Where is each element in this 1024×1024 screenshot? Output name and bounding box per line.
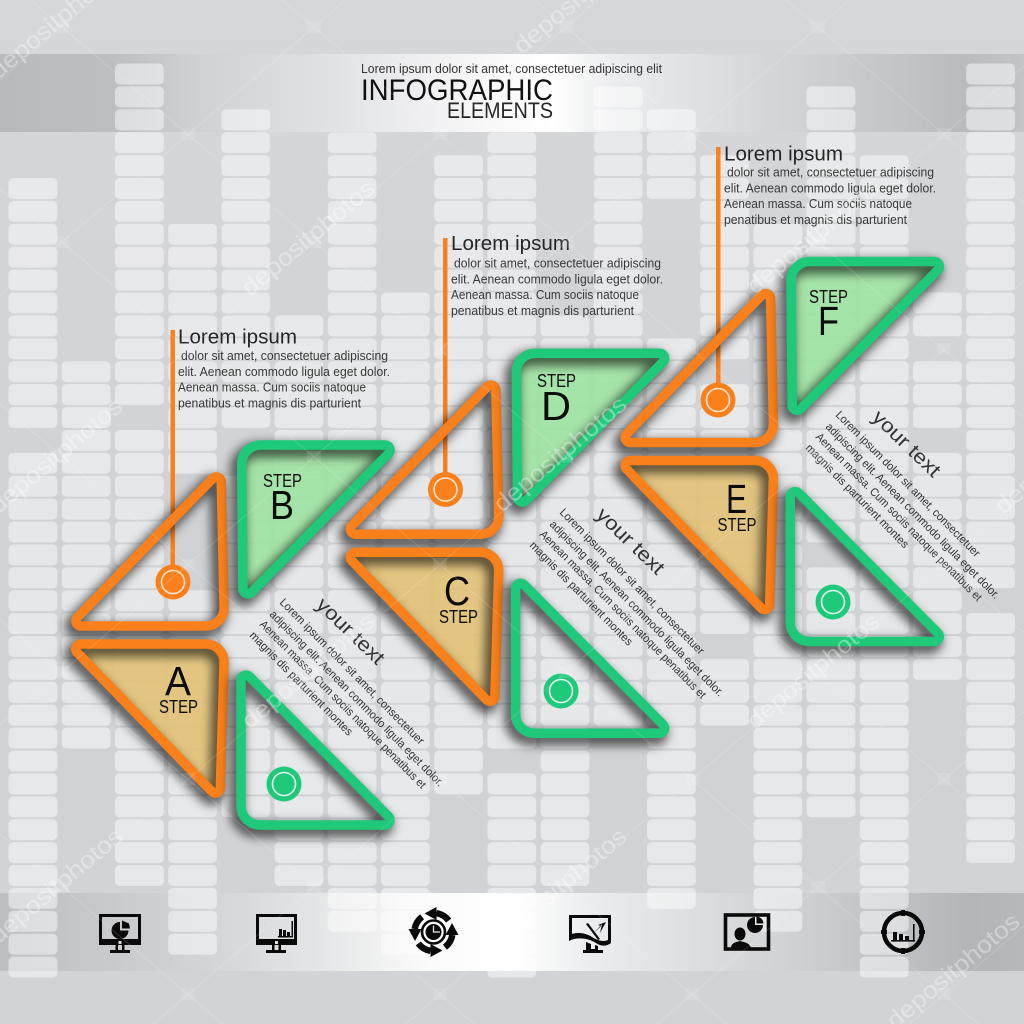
group 2: steps C and D [346,233,726,738]
heading and text block 2: elit. Aenean commodo ligula eget dolor. [451,272,663,286]
step E label [718,476,756,535]
step B label: B [270,482,294,528]
step A triangle [72,644,224,798]
callout stem E [716,147,720,387]
heading and text block 3 [724,144,936,227]
step C label [439,568,478,627]
title block [361,62,663,123]
heading and text block 1: Aenean massa. Cum sociis natoque [178,380,366,394]
step B triangle [238,445,390,599]
icon row [99,907,925,957]
circle marker C [428,472,463,507]
rotated text block 1: Lorem ipsum dolor sit amet, consectetuer [277,597,426,747]
step F label: STEP [809,287,848,307]
watermark text: depositphotos [742,608,885,735]
heading and text block 3: dolor sit amet, consectetuer adipiscing [727,166,934,180]
open orange triangle [346,385,499,539]
circle marker A [156,564,190,600]
step D label: STEP [537,371,576,391]
rotated text block 1: magnis dis parturient montes [247,630,355,739]
callout stem A [170,330,175,570]
heading and text block 2: dolor sit amet, consectetuer adipiscing [454,256,661,270]
step C label: STEP [439,607,478,627]
callout stem C [443,238,448,478]
watermark text: depositphotos [489,391,632,518]
heading and text block 1: elit. Aenean commodo ligula eget dolor. [178,365,390,379]
step E label: E [726,476,747,522]
icon: target with bar chart [881,910,925,954]
header band [0,54,1024,132]
step E label: STEP [718,515,756,535]
circle marker green [266,766,302,802]
circle marker green [816,584,850,620]
heading and text block 3: elit. Aenean commodo ligula eget dolor. [724,182,936,196]
heading and text block 3: Aenean massa. Cum sociis natoque [724,197,912,211]
step B label [263,471,302,528]
step F triangle [787,261,939,415]
open green triangle [512,583,665,738]
group 3: steps E and F [621,144,1002,646]
step B label: STEP [263,471,302,491]
step A label: A [165,658,192,704]
rotated text block 3: adipiscing elit. Aenean commodo ligula eget dolor. [823,421,1002,602]
step F label: F [818,298,839,344]
icon: monitor with pie chart [99,914,141,953]
open green triangle [237,675,390,830]
open orange triangle [72,477,224,631]
heading and text block 3: penatibus et magnis dis parturient [724,213,907,227]
rotated text block 3: magnis dis parturient montes [803,442,911,551]
rotated text block 3: Lorem ipsum dolor sit amet, consectetuer [833,409,982,560]
step E triangle [621,460,773,614]
rotated text block 2: magnis dis parturient montes [527,540,635,649]
icon: circular arrows with clock [408,907,458,957]
step D label [537,371,576,429]
heading and text block 1 [178,326,390,410]
rotated text block 3: Aenean massa. Cum sociis natoque penatibus et [813,431,984,604]
watermark text: depositphotos [237,608,380,735]
step A label [159,658,198,717]
circle marker green [544,674,578,708]
icon: curved monitor with arrow [569,915,611,953]
group 1: steps A and B [72,326,446,830]
circle marker E [700,382,736,418]
icon: monitor with bar chart [256,914,297,953]
rotated text block 3: your text [868,406,945,482]
rotated text block 2: adipiscing elit. Aenean commodo ligula eget dolor. [547,519,726,699]
watermark text: depositphotos [742,173,885,300]
step D label: D [541,383,571,429]
heading and text block 2 [451,233,663,318]
open green triangle [786,492,939,646]
step A label: STEP [159,697,198,717]
step C triangle [346,552,499,706]
rotated text block 1: adipiscing elit. Aenean commodo ligula eget dolor. [267,609,446,789]
heading and text block 1: penatibus et magnis dis parturient [178,396,361,410]
step C label: C [444,568,470,614]
heading and text block 3: Lorem ipsum [724,144,843,166]
open orange triangle [621,293,773,448]
heading and text block 2: Aenean massa. Cum sociis natoque [451,288,639,302]
rotated text block 2: Lorem ipsum dolor sit amet, consectetuer [557,507,706,657]
footer band [0,893,1024,971]
heading and text block 2: penatibus et magnis dis parturient [451,304,634,318]
heading and text block 2: Lorem ipsum [451,233,570,255]
watermark text: depositphotos [489,823,632,950]
title block: Lorem ipsum dolor sit amet, consectetuer adipiscing elit [361,62,663,76]
icon: presenter frame with pie chart [726,915,768,949]
rotated text block 2: your text [592,504,669,580]
watermark text: depositphotos [237,175,380,302]
step F label [809,287,848,344]
rotated text block 2: Aenean massa. Cum sociis natoque penatibus et [537,529,708,702]
heading and text block 1: Lorem ipsum [178,326,297,348]
step D triangle [512,353,665,507]
rotated text block 1: your text [312,594,389,670]
title block: ELEMENTS [447,98,553,123]
heading and text block 1: dolor sit amet, consectetuer adipiscing [181,349,388,363]
rotated text block 1: Aenean massa. Cum sociis natoque penatibus et [257,619,428,792]
title block: INFOGRAPHIC [361,74,553,107]
